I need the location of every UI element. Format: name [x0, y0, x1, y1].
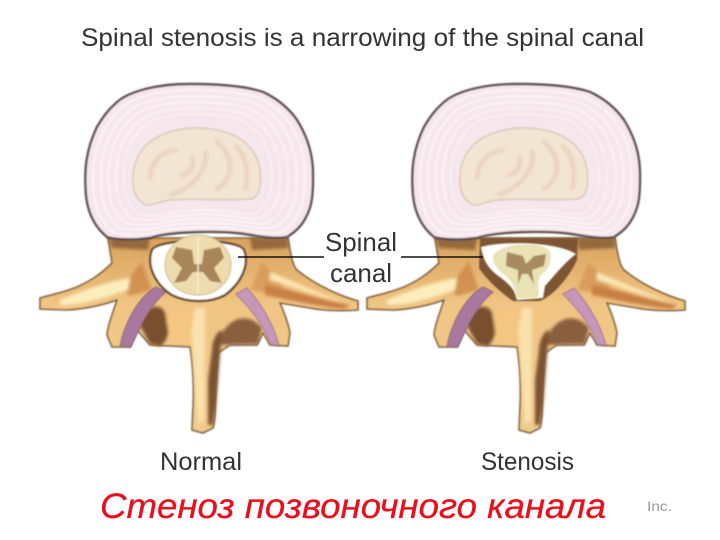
diagram: normal vertebra	[40, 84, 358, 433]
label text: canal	[330, 258, 392, 288]
leader lines	[238, 256, 483, 258]
normal: vertebral bone	[40, 238, 358, 433]
stenosis: thickened ligament narrowing the canal	[479, 238, 578, 301]
normal: spinal cord	[165, 235, 231, 295]
normal: spinal canal opening	[150, 241, 246, 301]
stenosis: canal opening	[481, 243, 576, 300]
normal: intervertebral disc	[85, 84, 313, 239]
watermark: Inc.	[647, 498, 672, 514]
diagram: stenosis vertebra	[367, 84, 685, 433]
label text	[325, 227, 397, 288]
stenosis: intervertebral disc	[412, 84, 640, 239]
label text: Spinal	[325, 227, 397, 257]
russian heading: Стеноз позвоночного канала	[100, 487, 606, 526]
caption: stenosis: Stenosis	[481, 448, 574, 476]
title: Spinal stenosis is a narrowing of the spinal canal	[81, 24, 644, 52]
stenosis: vertebral bone	[367, 238, 685, 433]
stenosis: compressed spinal cord	[493, 244, 551, 298]
caption: normal: Normal	[160, 448, 242, 476]
spinal canal label	[238, 227, 483, 288]
